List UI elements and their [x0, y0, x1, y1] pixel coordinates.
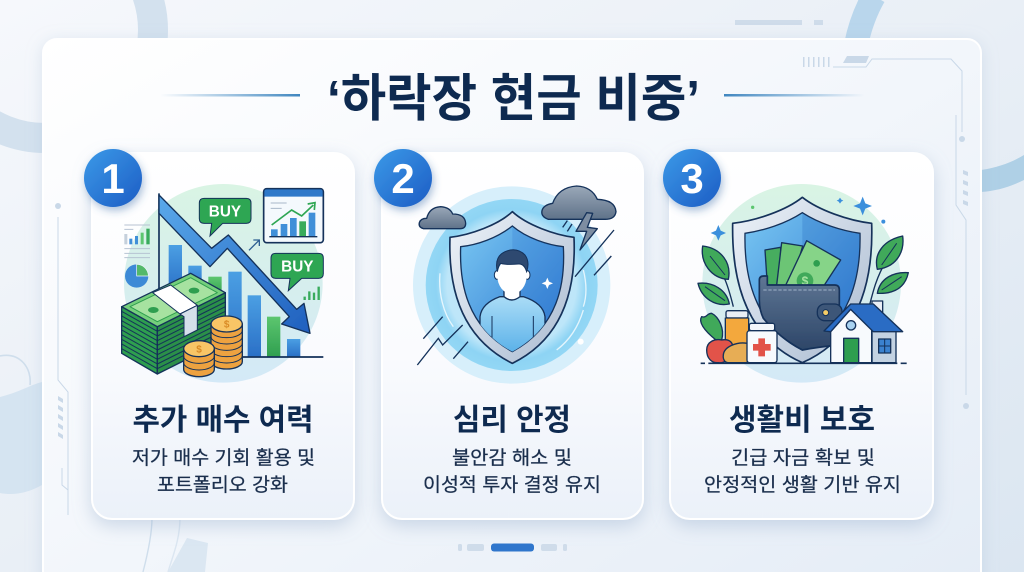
card 1 heading: 추가 매수 여력 [132, 404, 314, 437]
BUY bubble upper [199, 198, 251, 236]
card 2 background [382, 153, 643, 519]
sparkles [711, 197, 872, 241]
illustration: shielded person in storm [413, 186, 616, 384]
card 1 description: 저가 매수 기회 활용 및 [132, 447, 315, 469]
storm cloud [542, 186, 616, 219]
badge 1 [84, 149, 142, 207]
badge 2 [374, 149, 432, 207]
house [824, 301, 903, 363]
illustration: shield, wallet, house and supplies [698, 184, 908, 383]
card 3 description [704, 447, 901, 496]
BUY bubble lower: BUY [281, 258, 314, 275]
panel: card 2 psychological stability [374, 149, 643, 519]
browser window chart [264, 189, 323, 243]
card 3 description: 안정적인 생활 기반 유지 [704, 474, 901, 496]
badge 1: 1 [101, 155, 125, 202]
panel: card 3 living expense protection [663, 149, 933, 519]
banknotes: $ [802, 274, 809, 288]
card 1 description [132, 447, 315, 496]
jar [725, 311, 749, 347]
card 2 heading: 심리 안정 [453, 404, 571, 437]
vegetables and fruit [701, 313, 747, 363]
title divider left [160, 94, 300, 96]
coin stacks: $ [224, 320, 230, 331]
stack of cash [122, 273, 225, 374]
card 2 description [423, 447, 601, 496]
medicine bottle [747, 323, 777, 363]
leaves left [698, 246, 733, 307]
mini chart and pie [124, 225, 150, 288]
small cloud [419, 207, 466, 229]
title divider right [724, 94, 865, 96]
lightning bolt [576, 213, 597, 250]
card 2 description: 이성적 투자 결정 유지 [423, 474, 601, 496]
pagination indicator [458, 544, 567, 552]
title: ‘하락장 현금 비중’ [327, 70, 700, 127]
coin stacks [184, 316, 242, 377]
badge 3: 3 [680, 155, 704, 202]
wallet [759, 276, 842, 350]
banknotes [765, 241, 841, 289]
illustration: falling chart, cash and coins [122, 184, 323, 383]
shield with person [450, 212, 574, 363]
card 3 heading: 생활비 보호 [729, 404, 875, 437]
BUY bubble lower [271, 253, 323, 291]
card 2 description: 불안감 해소 및 [452, 447, 572, 469]
card 1 description: 포트폴리오 강화 [157, 474, 288, 496]
coin stacks: $ [196, 344, 202, 355]
badge 3 [663, 149, 721, 207]
BUY bubble upper: BUY [209, 203, 241, 220]
panel: card 1 additional buying power [84, 149, 354, 519]
leaves right [868, 236, 908, 310]
card 3 background [670, 153, 933, 519]
card 3 description: 긴급 자금 확보 및 [731, 447, 875, 469]
shield [733, 197, 872, 363]
badge 2: 2 [391, 155, 415, 202]
card 1 background [92, 153, 354, 519]
